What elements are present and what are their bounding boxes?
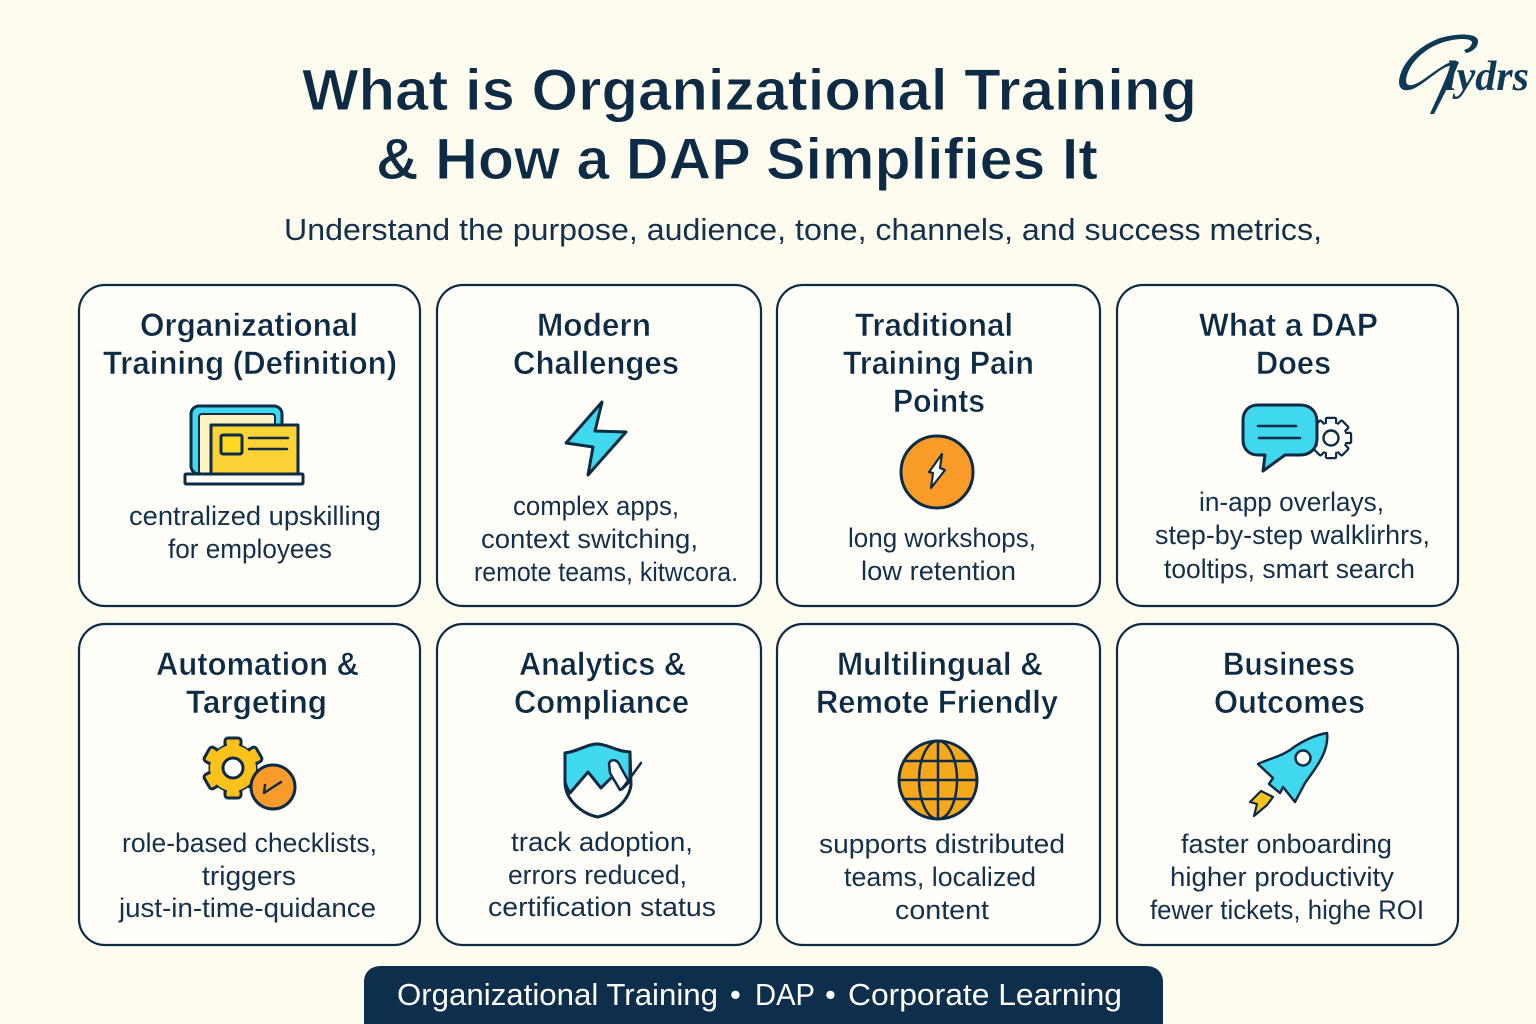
- body text: in-app overlays,: [1199, 487, 1384, 517]
- heading: Automation &: [156, 646, 359, 682]
- icon: laptop with card: [185, 406, 303, 484]
- heading: Outcomes: [1214, 684, 1365, 720]
- heading: Points: [893, 383, 985, 419]
- heading: Compliance: [514, 684, 689, 720]
- body text: content: [895, 895, 990, 925]
- icon: rocket: [1250, 733, 1327, 816]
- heading: [514, 646, 689, 720]
- panel: automation and targeting: [79, 624, 420, 945]
- body text: just-in-time-quidance: [118, 893, 376, 923]
- body text: [474, 491, 738, 587]
- footer banner: DAP: [755, 977, 815, 1012]
- panel: modern challenges: [437, 285, 761, 606]
- body text: [1155, 487, 1430, 584]
- body text: errors reduced,: [508, 860, 687, 890]
- body text: complex apps,: [513, 491, 679, 521]
- heading: [156, 646, 359, 720]
- panel: business outcomes: [1117, 624, 1458, 945]
- heading: [1214, 646, 1365, 720]
- heading: Modern: [537, 307, 651, 343]
- body text: [118, 828, 377, 923]
- heading: What a DAP: [1199, 307, 1378, 343]
- subtitle: Understand the purpose, audience, tone, channels, and success metrics,: [284, 212, 1322, 247]
- footer banner: Organizational Training: [397, 977, 718, 1012]
- body text: [129, 501, 381, 564]
- body text: triggers: [202, 861, 296, 891]
- body text: role-based checklists,: [122, 828, 377, 858]
- icon: shield with check: [565, 744, 641, 817]
- title: & How a DAP Simplifies It: [376, 127, 1098, 192]
- heading: [816, 646, 1058, 720]
- body text: [819, 829, 1065, 925]
- body text: low retention: [861, 556, 1016, 586]
- heading: Targeting: [186, 684, 327, 720]
- heading: [1199, 307, 1378, 381]
- heading: Remote Friendly: [816, 684, 1058, 720]
- icon: lightning bolt: [566, 402, 626, 475]
- footer banner: Corporate Learning: [848, 977, 1122, 1012]
- title: What is Organizational Training: [302, 58, 1197, 123]
- heading: Analytics &: [519, 646, 686, 682]
- heading: Organizational: [140, 307, 358, 343]
- icon: globe: [899, 741, 977, 819]
- heading: Business: [1223, 646, 1355, 682]
- footer banner: •: [825, 977, 836, 1012]
- body text: [848, 523, 1036, 586]
- body text: centralized upskilling: [129, 501, 381, 531]
- body text: fewer tickets, highe ROI: [1150, 895, 1424, 925]
- panel: multilingual and remote friendly: [777, 624, 1100, 945]
- heading: Does: [1256, 345, 1331, 381]
- body text: supports distributed: [819, 829, 1065, 859]
- body text: remote teams, kitwcora.: [474, 557, 738, 587]
- body text: for employees: [168, 534, 332, 564]
- heading: Traditional: [855, 307, 1013, 343]
- title: [302, 58, 1197, 192]
- logo: lydrs: [1445, 54, 1529, 100]
- body text: track adoption,: [511, 827, 693, 857]
- body text: teams, localized: [844, 862, 1036, 892]
- body text: certification status: [488, 892, 716, 922]
- panel: analytics and compliance: [437, 624, 761, 945]
- heading: Training (Definition): [103, 345, 397, 381]
- panel: what a dap does: [1117, 285, 1458, 606]
- heading: Challenges: [513, 345, 679, 381]
- body text: faster onboarding: [1181, 829, 1392, 859]
- icon: gear and check badge: [203, 738, 295, 809]
- icon: orange circle bolt: [901, 436, 973, 508]
- body text: [488, 827, 716, 922]
- heading: Multilingual &: [837, 646, 1043, 682]
- body text: context switching,: [481, 524, 698, 554]
- heading: Training Pain: [843, 345, 1034, 381]
- logo: G: [1398, 90, 1399, 91]
- body text: higher productivity: [1170, 862, 1394, 892]
- heading: [103, 307, 397, 381]
- body text: long workshops,: [848, 523, 1036, 553]
- heading: [843, 307, 1034, 419]
- icon: chat bubble and gear: [1243, 405, 1351, 471]
- footer banner: •: [730, 977, 741, 1012]
- body text: tooltips, smart search: [1164, 554, 1415, 584]
- logo: [1398, 34, 1529, 114]
- body text: [1150, 829, 1424, 925]
- panel: traditional training pain points: [777, 285, 1100, 606]
- heading: [513, 307, 679, 381]
- footer banner: [364, 966, 1163, 1024]
- panel: organizational training definition: [79, 285, 420, 606]
- body text: step-by-step walklirhrs,: [1155, 520, 1430, 550]
